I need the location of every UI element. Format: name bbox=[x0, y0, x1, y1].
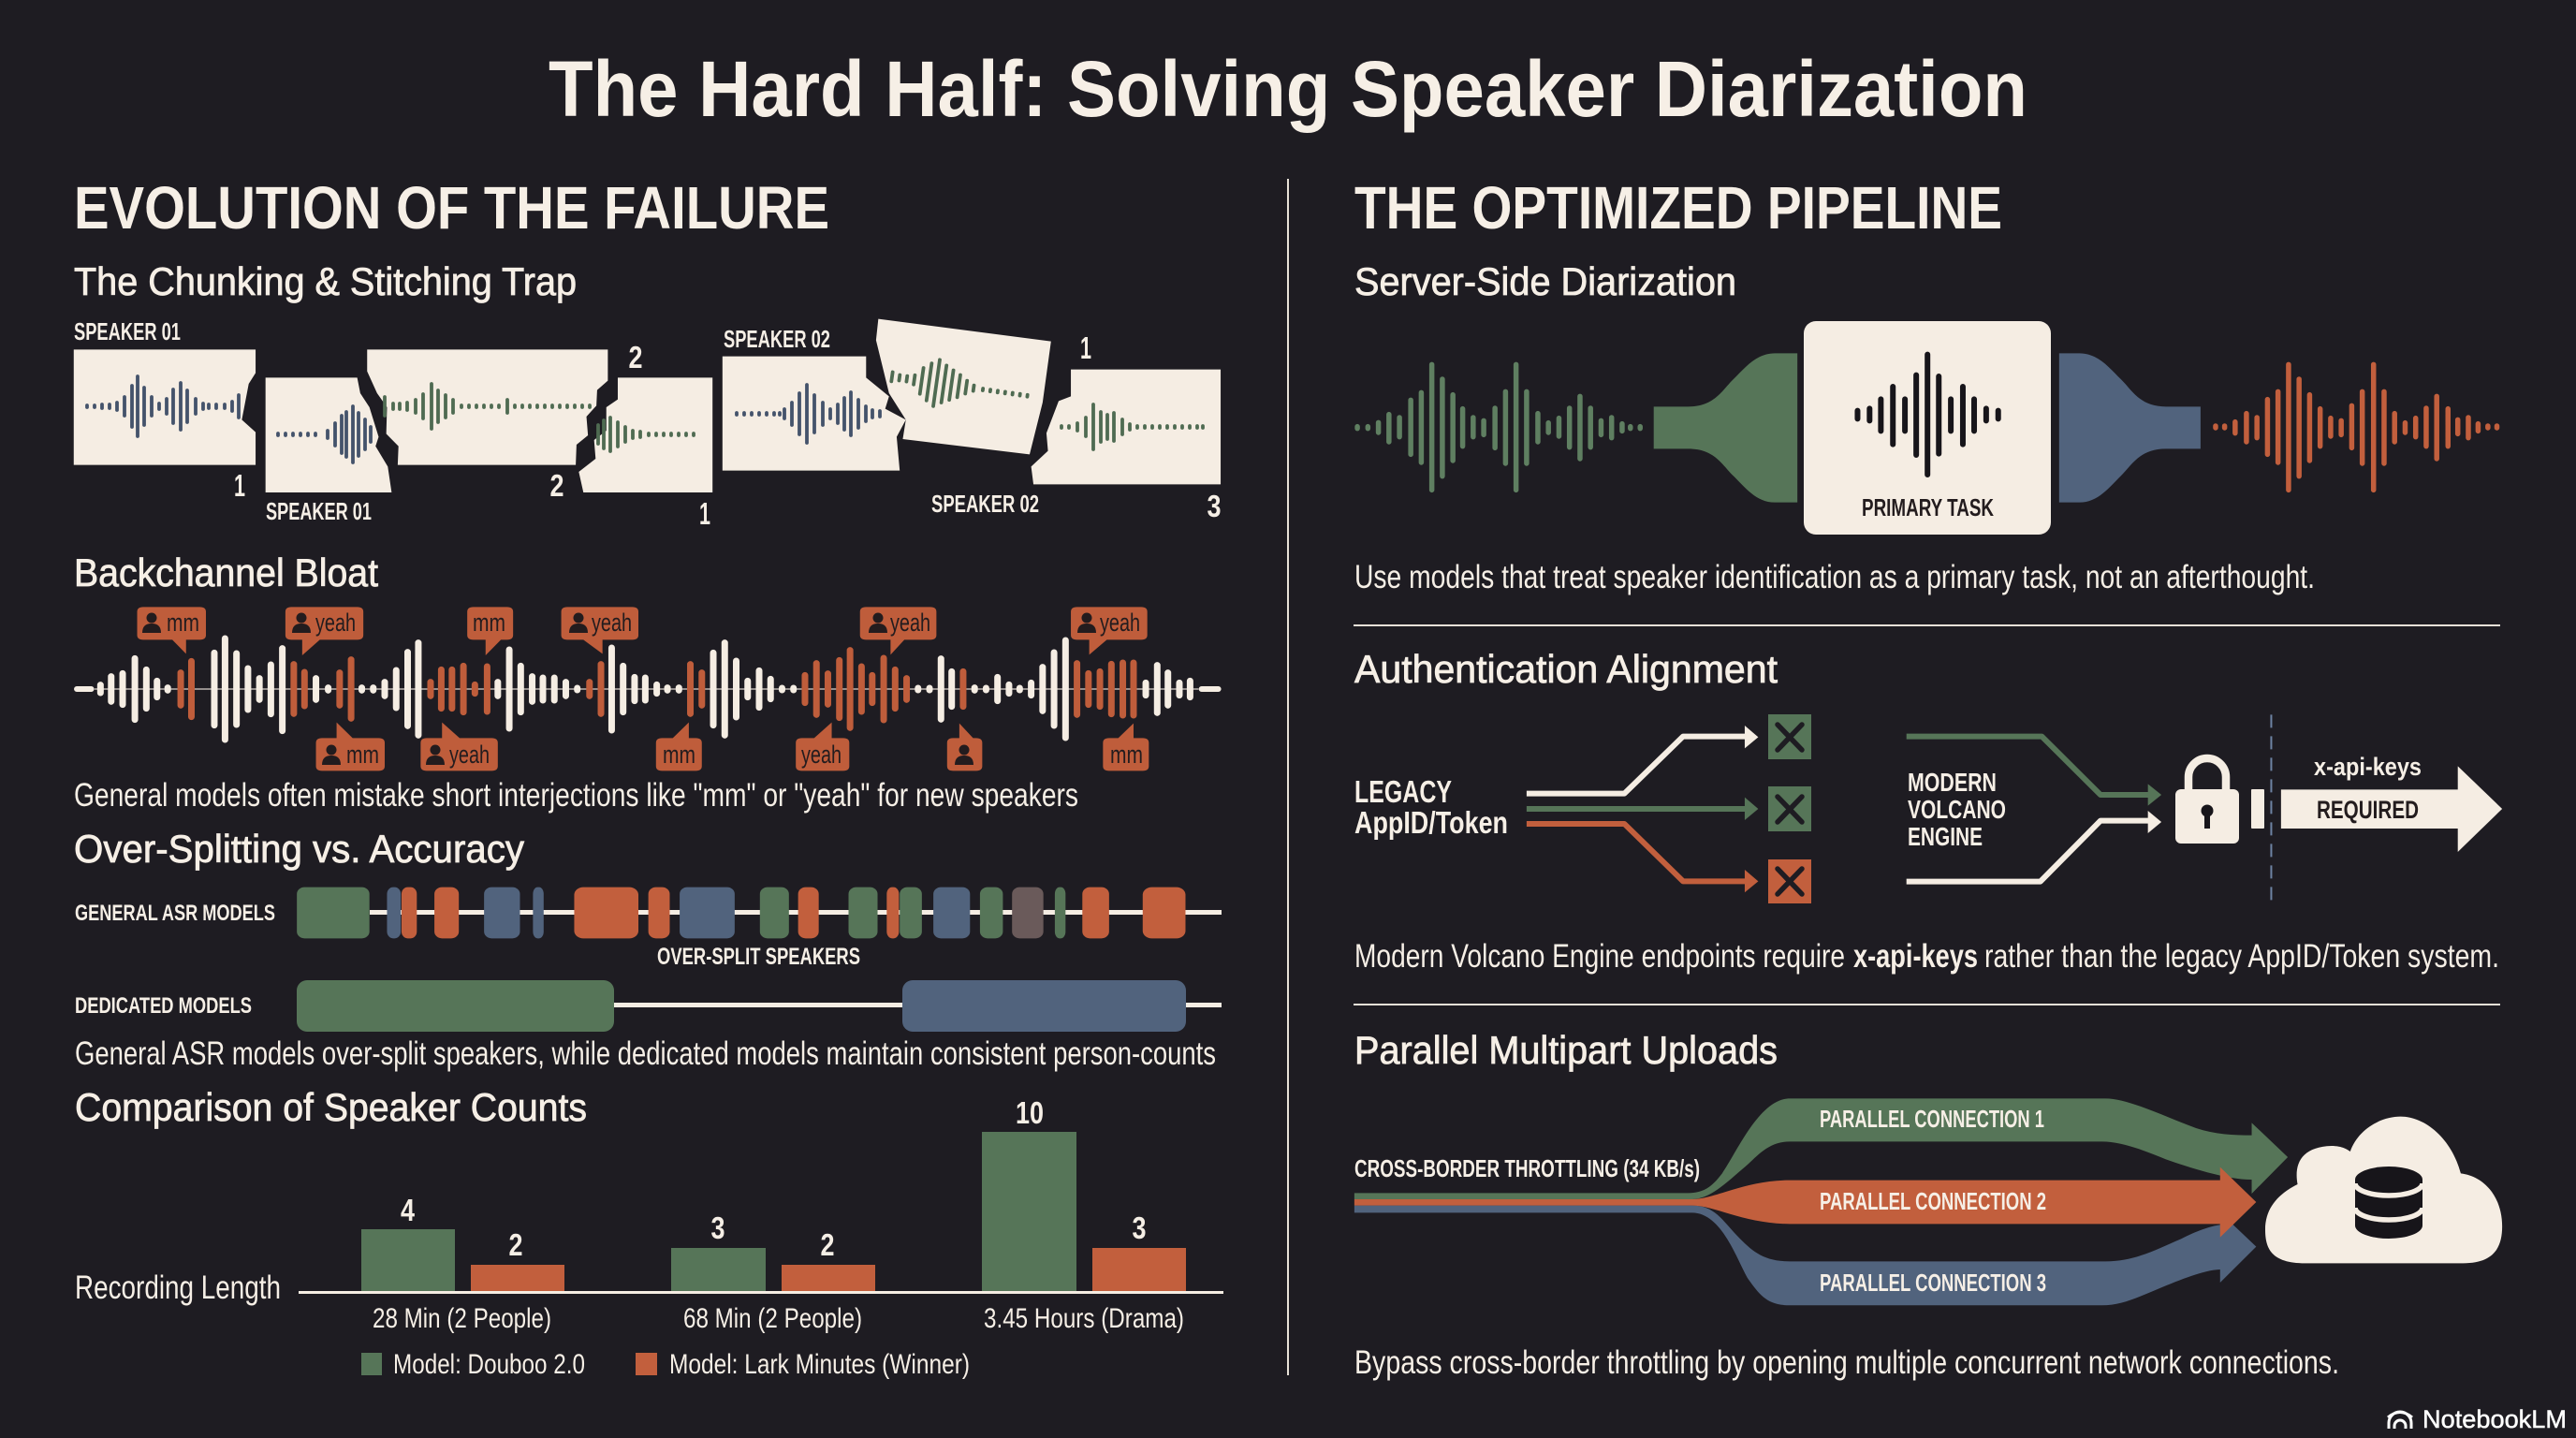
legend bbox=[361, 1349, 970, 1380]
heading: chunking and stitching trap: The Chunking & Stitching Trap bbox=[74, 259, 577, 303]
chart: speaker count bars: 10 bbox=[1016, 1095, 1044, 1130]
caption: authentication: x-api-keys bbox=[1853, 938, 1978, 975]
card: primary task: PRIMARY TASK bbox=[1862, 493, 1994, 521]
heading: the optimized pipeline: THE OPTIMIZED PIPELINE bbox=[1354, 174, 2002, 242]
panel: torn chunk papers: 1 bbox=[1080, 330, 1091, 365]
panel: torn chunk papers: 2 bbox=[629, 340, 642, 374]
heading: comparison of speaker counts: Comparison of Speaker Counts bbox=[75, 1085, 587, 1129]
callouts: interjection speech bubbles: mm bbox=[663, 741, 695, 769]
title: The Hard Half: Solving Speaker Diarization bbox=[549, 45, 2027, 133]
callouts: interjection speech bubbles: yeah bbox=[1100, 609, 1140, 637]
callouts: interjection speech bubbles: mm bbox=[1110, 741, 1143, 769]
icon: padlock bbox=[2175, 758, 2239, 844]
heading: backchannel bloat: Backchannel Bloat bbox=[74, 550, 378, 594]
chart: dedicated models timeline: DEDICATED MODELS bbox=[75, 993, 252, 1019]
diagram: modern volcano engine lock and key arrow bbox=[1907, 714, 2502, 905]
panel: torn chunk papers: 1 bbox=[234, 468, 245, 503]
diagram: parallel upload ribbons: PARALLEL CONNECTION 3 bbox=[1820, 1269, 2046, 1297]
callouts: interjection speech bubbles: yeah bbox=[449, 741, 490, 769]
callouts: interjection speech bubbles: yeah bbox=[592, 609, 632, 637]
chart: dedicated models timeline bbox=[75, 980, 1222, 1032]
chart: speaker count bars: 2 bbox=[820, 1227, 835, 1262]
callouts: interjection speech bubbles: mm bbox=[346, 741, 379, 769]
diagram: legacy auth paths bbox=[1354, 714, 1811, 903]
chart: speaker count bars: 3 bbox=[1133, 1211, 1146, 1245]
chart: speaker count bars bbox=[75, 1095, 1223, 1334]
panel: torn chunk papers bbox=[74, 317, 1221, 531]
logo: NotebookLM: NotebookLM bbox=[2422, 1405, 2567, 1433]
panel: torn chunk papers: SPEAKER 02 bbox=[931, 490, 1039, 518]
diagram: legacy auth paths: LEGACY bbox=[1354, 774, 1452, 809]
chart: speaker count bars: 68 Min (2 People) bbox=[683, 1303, 862, 1334]
chart: speaker count bars: 3 bbox=[711, 1211, 724, 1245]
diagram: modern volcano engine lock and key arrow: VOLCANO bbox=[1908, 795, 2006, 824]
panel: torn chunk papers: SPEAKER 02 bbox=[724, 325, 830, 353]
panel: torn chunk papers: 3 bbox=[1208, 489, 1221, 523]
callouts: interjection speech bubbles: mm bbox=[167, 609, 199, 637]
diagram: modern volcano engine lock and key arrow: x-api-keys bbox=[2314, 753, 2422, 781]
chart: general ASR timeline: OVER-SPLIT SPEAKERS bbox=[657, 944, 860, 970]
panel: torn chunk papers: 1 bbox=[699, 496, 710, 531]
diagram: parallel upload ribbons: PARALLEL CONNECTION 2 bbox=[1820, 1187, 2046, 1215]
legend: Model: Lark Minutes (Winner) bbox=[669, 1349, 970, 1380]
heading: parallel multipart uploads: Parallel Multipart Uploads bbox=[1354, 1028, 1778, 1072]
diagram: modern volcano engine lock and key arrow: REQUIRED bbox=[2317, 796, 2419, 824]
panel: torn chunk papers: SPEAKER 01 bbox=[74, 317, 181, 345]
diagram: parallel upload ribbons: CROSS-BORDER THROTTLING (34 KB/s) bbox=[1354, 1154, 1700, 1182]
chart: backchannel waveform bbox=[77, 638, 1219, 740]
callouts: interjection speech bubbles: yeah bbox=[890, 609, 930, 637]
heading: over-splitting: Over-Splitting vs. Accuracy bbox=[74, 827, 524, 871]
caption: backchannel: General models often mistake short interjections like "mm" or "yeah" for new speakers bbox=[74, 777, 1078, 814]
diagram: modern volcano engine lock and key arrow: ENGINE bbox=[1908, 822, 1983, 851]
legend: Model: Douboo 2.0 bbox=[393, 1349, 585, 1380]
icon: cloud database bbox=[2265, 1117, 2502, 1263]
diagram: parallel upload ribbons: PARALLEL CONNECTION 1 bbox=[1820, 1105, 2044, 1133]
chart: speaker count bars: 2 bbox=[509, 1227, 522, 1262]
heading: server-side diarization: Server-Side Diarization bbox=[1354, 259, 1736, 303]
callouts: interjection speech bubbles: yeah bbox=[801, 741, 842, 769]
chart: speaker count bars: 4 bbox=[401, 1193, 416, 1227]
heading: evolution of the failure: EVOLUTION OF THE FAILURE bbox=[74, 174, 829, 242]
callouts: interjection speech bubbles: mm bbox=[473, 609, 505, 637]
caption: server-side: Use models that treat speaker identification as a primary task, not an afterthought. bbox=[1354, 559, 2315, 595]
panel: torn chunk papers: SPEAKER 01 bbox=[266, 497, 372, 525]
chart: speaker count bars: 28 Min (2 People) bbox=[373, 1303, 551, 1334]
panel: server-side diarization diagram bbox=[1357, 321, 2496, 535]
chart: speaker count bars: 3.45 Hours (Drama) bbox=[984, 1303, 1184, 1334]
chart: speaker count bars: Recording Length bbox=[75, 1269, 281, 1306]
diagram: legacy auth paths: AppID/Token bbox=[1354, 805, 1508, 840]
callouts: interjection speech bubbles: yeah bbox=[315, 609, 356, 637]
diagram: parallel upload ribbons bbox=[1354, 1098, 2288, 1305]
caption: authentication: Modern Volcano Engine endpoints require bbox=[1354, 938, 1845, 975]
chart: general ASR timeline: GENERAL ASR MODELS bbox=[75, 901, 275, 926]
caption: parallel uploads: Bypass cross-border throttling by opening multiple concurrent network connections. bbox=[1354, 1344, 2339, 1381]
panel: torn chunk papers: 2 bbox=[550, 468, 564, 503]
card: primary task bbox=[1804, 321, 2051, 535]
diagram: modern volcano engine lock and key arrow: MODERN bbox=[1908, 768, 1997, 797]
caption: over-splitting: General ASR models over-split speakers, while dedicated models maintain consistent person-counts bbox=[75, 1035, 1216, 1072]
chart: general ASR timeline bbox=[75, 888, 1222, 970]
caption: authentication bbox=[1354, 938, 2499, 975]
heading: authentication alignment: Authentication Alignment bbox=[1354, 647, 1778, 691]
callouts: interjection speech bubbles bbox=[138, 607, 1149, 770]
